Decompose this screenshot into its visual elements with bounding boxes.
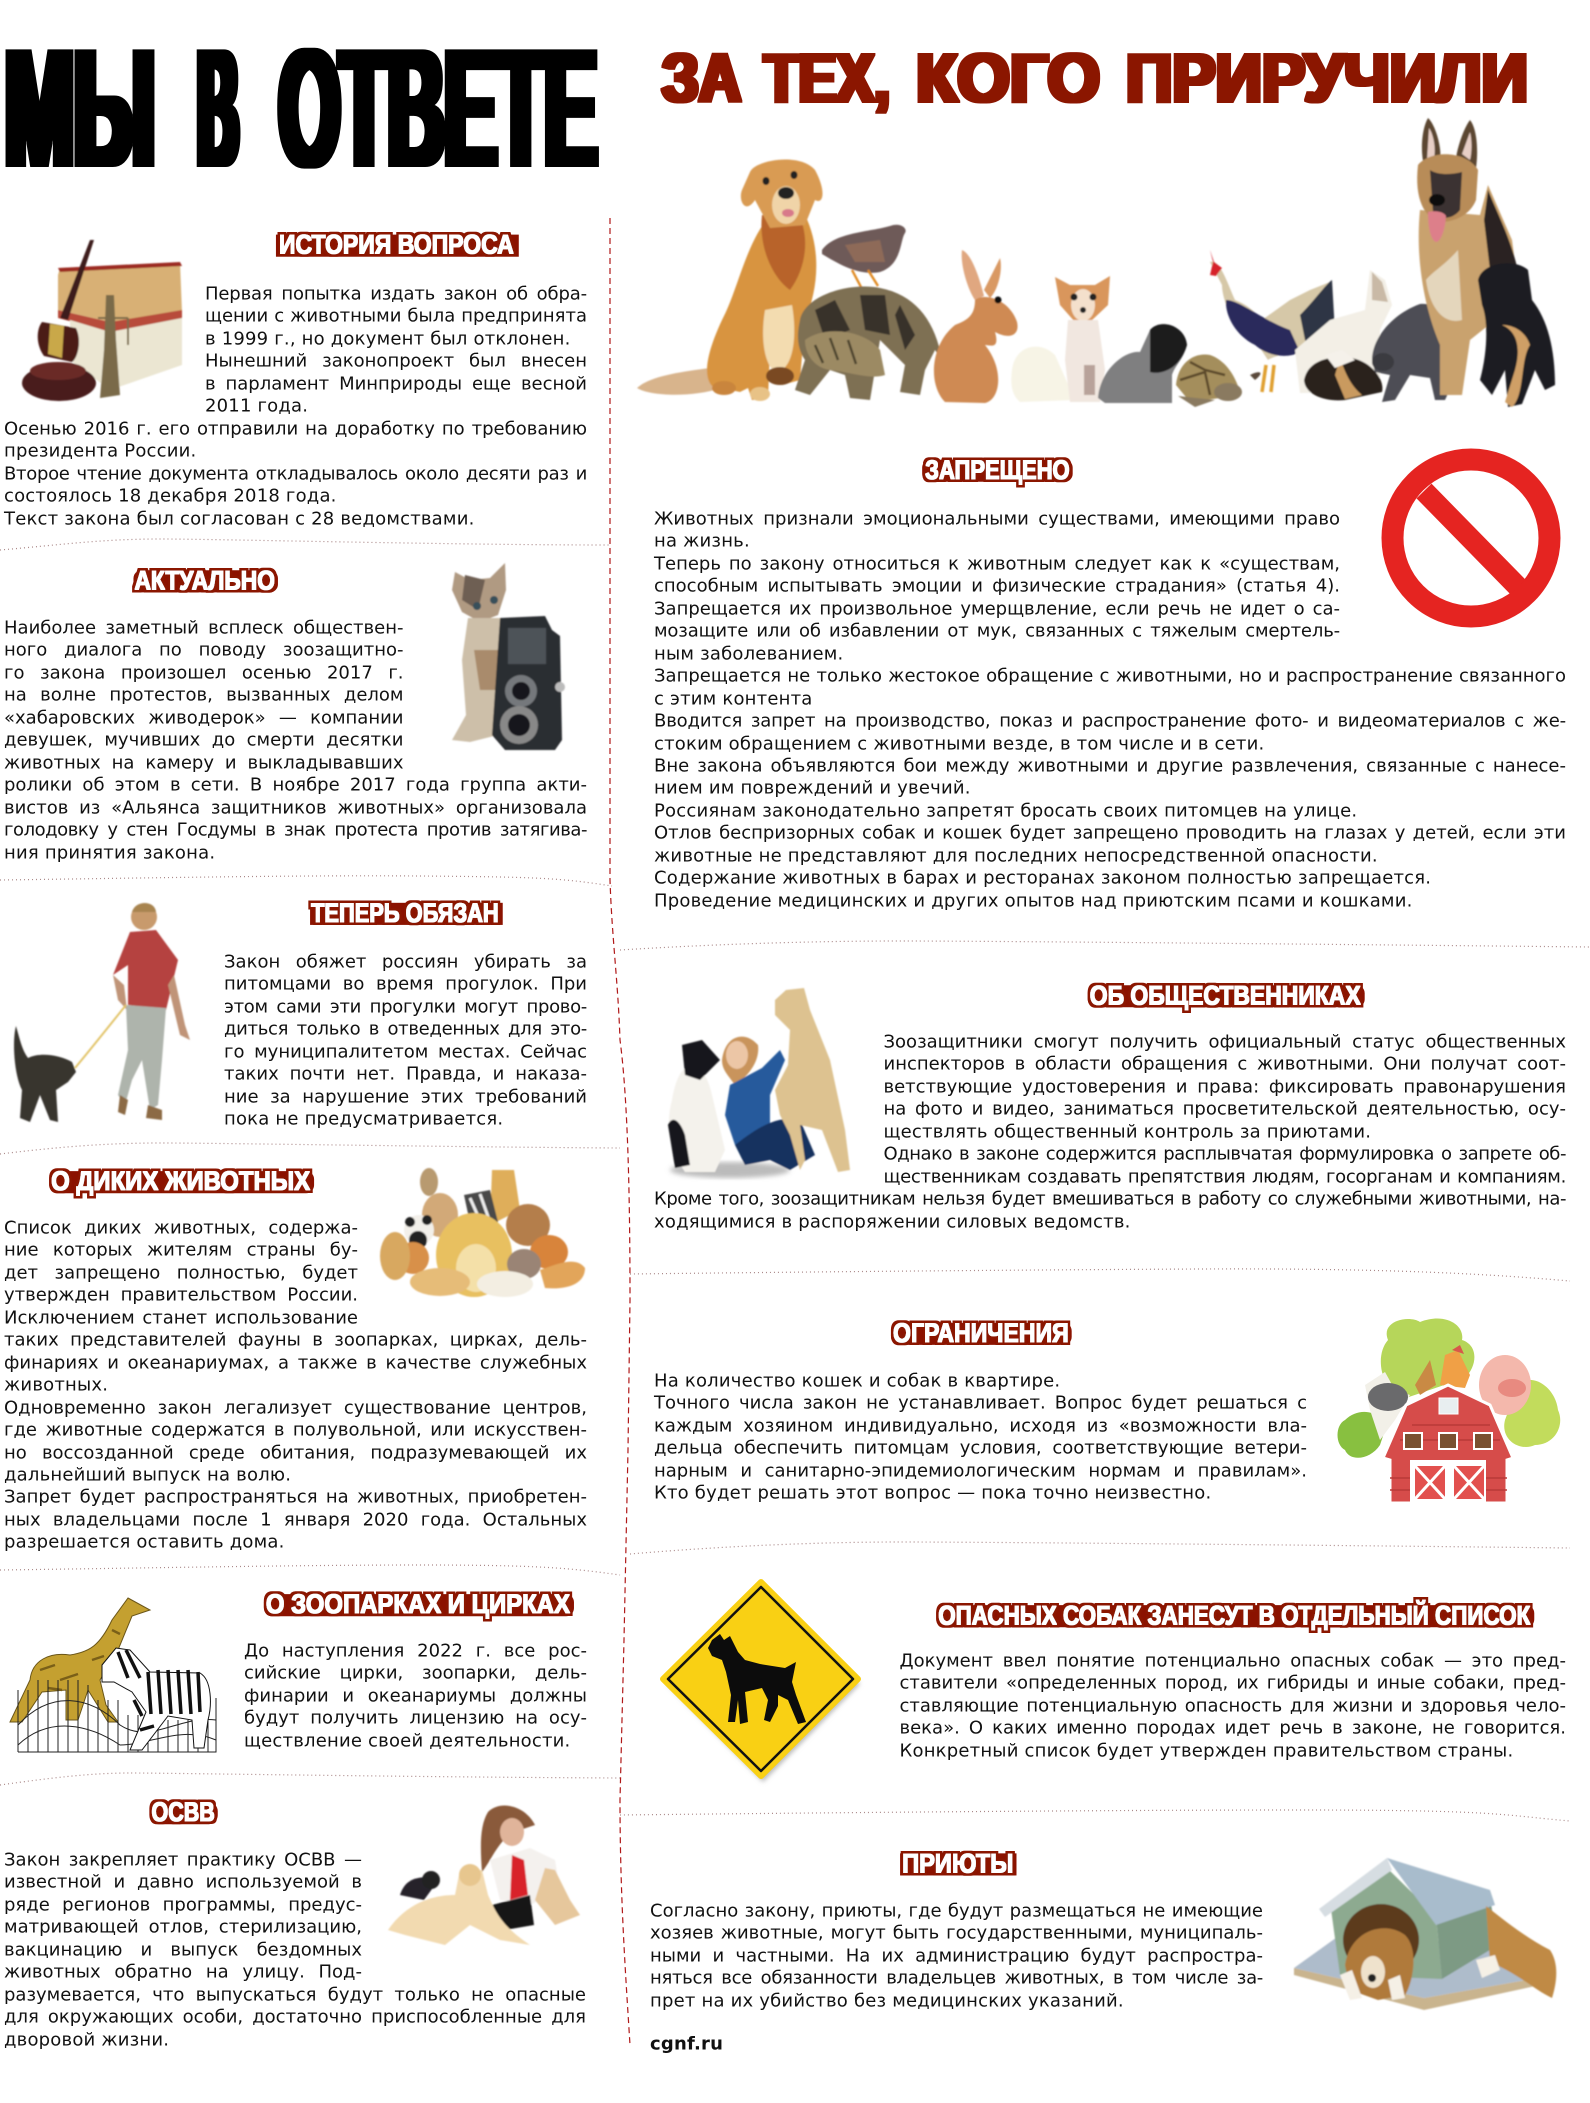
guinea pig [1304, 350, 1382, 400]
text: о зоопарках и цирках: сийские цирки, зоопарки, дель- [244, 1663, 587, 1684]
text: запрещено: Животных признали эмоциональными существами, имеющими право [654, 508, 1340, 530]
rabbit [934, 250, 1018, 403]
text: об общественниках [654, 1032, 1566, 1232]
text: актуально: девушек, мучивших до смерти десятки [4, 730, 404, 751]
text: история вопроса: в 1999 г., но документ был отклонен. [205, 328, 571, 349]
text: о диких животных: дет запрещено полностью, будет [4, 1262, 358, 1283]
black puppy [1478, 263, 1555, 407]
heading: актуально: АКТУАЛЬНО [134, 564, 275, 595]
heading: теперь обязан: ТЕПЕРЬ ОБЯЗАН [311, 897, 499, 928]
text: приюты: няться все обязанности владельцев животных, в том числе за- [650, 1968, 1263, 1989]
illustration: dog in kennel [1294, 1858, 1556, 2010]
text: ОТВЕТЕ [279, 14, 597, 202]
text: запрещено: ным заболеванием. [654, 643, 843, 664]
text: ограничения: На количество кошек и собак в квартире. [654, 1370, 1060, 1392]
text: приюты [650, 1900, 1263, 2011]
text: запрещено: мозащите или об избавлении от мук, связанных с тяжелым смертель- [654, 621, 1340, 642]
text: теперь обязан: пока не предусматривается. [224, 1109, 503, 1130]
text: актуально: вистов из «Альянса защитников животных» организовала [4, 797, 587, 818]
text: о диких животных: Одновременно закон легализует существование центров, [4, 1397, 587, 1418]
german shepherd [1417, 118, 1520, 395]
text: теперь обязан: ние за нарушение этих требований [224, 1086, 587, 1107]
text: о диких животных: утвержден правительством России. [4, 1285, 358, 1306]
text: освв [4, 1850, 586, 2050]
text: запрещено: способным испытывать эмоции и физические страдания» (статья 4). [654, 576, 1340, 597]
text: о зоопарках и цирках: ществление своей деятельности. [244, 1730, 570, 1751]
text: опасные собаки: Документ ввел понятие потенциально опасных собак — это пред- [900, 1650, 1566, 1672]
text: запрещено: с этим контента [654, 688, 812, 709]
text: опасные собаки [900, 1650, 1566, 1761]
illustration: barn with animals [1338, 1318, 1560, 1503]
white cat [1295, 270, 1392, 393]
text: запрещено: нием им повреждений и увечий. [654, 778, 971, 799]
text: запрещено: Отлов беспризорных собак и кошек будет запрещено проводить на глазах у детей, если эти [654, 823, 1566, 844]
text: о диких животных: Запрет будет распространяться на животных, приобретен- [4, 1487, 587, 1508]
headings [49, 229, 1534, 1878]
text: актуально: голодовку у стен Госдумы в знак протеста против затягива- [4, 820, 587, 841]
title: main black: МЫ [5, 14, 155, 202]
title: main black [5, 14, 597, 202]
text: запрещено: Вводится запрет на производство, показ и распространение фото- и видеоматериалов с же- [654, 711, 1566, 732]
text: ограничения: Точного числа закон не устанавливает. Вопрос будет решаться с [654, 1393, 1307, 1414]
text: история вопроса: Второе чтение документа откладывалось около десяти раз и [4, 463, 587, 484]
text: о диких животных: дальнейший выпуск на волю. [4, 1464, 291, 1485]
text: освв: Закон закрепляет практику ОСВВ — [4, 1850, 362, 1870]
title: red subtitle [662, 39, 1528, 117]
title: red subtitle: КОГО [916, 39, 1100, 117]
text: о зоопарках и цирках: финарии и океанариумы должны [244, 1685, 587, 1706]
text: актуально: го закона произошел осенью 2017 г. [4, 662, 404, 683]
black pig [1372, 304, 1458, 402]
text: актуально: ролики об этом в сети. В ноябре 2017 года группа акти- [4, 775, 587, 796]
text: о диких животных [4, 1218, 587, 1553]
text: опасные собаки: Конкретный список будет утвержден правительством страны. [900, 1740, 1513, 1761]
text: об общественниках: инспекторов в области обращения с животными. Они получат соот- [884, 1054, 1566, 1075]
text: освв: известной и давно используемой в [4, 1872, 362, 1893]
text: запрещено: Содержание животных в барах и ресторанах законом полностью запрещается. [654, 868, 1431, 889]
text: история вопроса: в парламент Минприроды еще весной [205, 373, 587, 394]
text: запрещено: на жизнь. [654, 531, 750, 552]
text: опасные собаки: ставители «определенных пород, их гибриды и иные собаки, пред- [900, 1673, 1566, 1694]
text: о диких животных: разрешается оставить дома. [4, 1532, 285, 1553]
text: о диких животных: финариях и океанариумах, а также в качестве служебных [4, 1352, 587, 1373]
photo: woman with dogs [668, 988, 850, 1178]
text: теперь обязан: питомцами во время прогулок. При [224, 974, 587, 995]
text: запрещено: Вне закона объявляются бои между животными и другие развлечения, связанные с нанесе- [654, 755, 1566, 776]
text: приюты: ными и частными. На их администрацию будут распростра- [650, 1945, 1263, 1966]
text: ограничения [654, 1370, 1307, 1504]
heading: о диких животных: О ДИКИХ ЖИВОТНЫХ [51, 1165, 310, 1196]
text: актуально: животных на камеру и выкладывавших [4, 752, 404, 773]
text: теперь обязан: диться только в отведенных для это- [224, 1019, 587, 1040]
text: запрещено: Запрещается не только жестокое обращение с животными, но и распространение связанного [654, 666, 1566, 687]
icon: prohibition sign [1392, 460, 1550, 616]
text: освв: разумевается, что выпускаться будут только не опасные [4, 1984, 586, 2005]
text: приюты: хозяев животные, могут быть государственными, муниципаль- [650, 1923, 1263, 1944]
text: о диких животных: Исключением станет использование [4, 1307, 358, 1328]
text: теперь обязан: таких почти нет. Правда, и наказа- [224, 1064, 587, 1085]
title: red subtitle: ЗА [662, 39, 741, 117]
text: освв: животных обратно на улицу. Под- [4, 1962, 362, 1983]
text: актуально [4, 618, 587, 863]
text: об общественниках: Зоозащитники смогут получить официальный статус общественных [884, 1032, 1566, 1052]
text: история вопроса: Текст закона был согласован с 28 ведомствами. [4, 508, 475, 529]
text: ограничения: дельца обеспечить питомцам условия, соответствующие ветери- [654, 1438, 1307, 1459]
text: теперь обязан: этом сами эти прогулки могут прово- [224, 996, 587, 1017]
title: main black: В [198, 14, 238, 202]
tortoise [1176, 354, 1242, 407]
photo: row of animals [637, 118, 1555, 407]
text: о диких животных: Список диких животных, содержа- [4, 1218, 358, 1238]
heading: об общественниках: ОБ ОБЩЕСТВЕННИКАХ [1090, 979, 1361, 1010]
golden retriever [637, 159, 823, 401]
text: история вопроса: Первая попытка издать закон об обра- [205, 284, 587, 304]
text: запрещено: животные не представляют для последних непосредственной опасности. [654, 845, 1378, 866]
rooster [1210, 250, 1336, 392]
heading: история вопроса: ИСТОРИЯ ВОПРОСА [279, 229, 514, 260]
text: приюты: Согласно закону, приюты, где будут размещаться не имеющие [650, 1900, 1263, 1922]
text: приюты: прет на их убийство без медицинских указаний. [650, 1990, 1124, 2011]
white chick [1011, 347, 1075, 402]
text: теперь обязан: го муниципалитетом местах. Сейчас [224, 1041, 587, 1062]
text: о диких животных: ние которых жителям страны бу- [4, 1240, 358, 1261]
photo: pile of wild animal toys [380, 1168, 585, 1297]
text: запрещено [654, 508, 1566, 911]
text: история вопроса: Нынешний законопроект был внесен [205, 351, 587, 372]
photo: gavel, law books, statue [22, 240, 182, 401]
text: опасные собаки: века». О каких именно породах идет речь в законе, не говорится. [900, 1718, 1566, 1739]
illustration: giraffe and zebra at fence [10, 1598, 216, 1752]
text: актуально: «хабаровских живодерок» — компании [4, 707, 404, 728]
text: освв: для окружающих особи, достаточно приспособленные для [4, 2007, 586, 2028]
text: актуально: ния принятия закона. [4, 842, 215, 863]
text: о диких животных: где животные содержатся в полувольной, или искусствен- [4, 1420, 587, 1441]
heading: приюты: ПРИЮТЫ [902, 1847, 1013, 1878]
text: опасные собаки: ставляющие потенциальную опасность для жизни и здоровья чело- [900, 1695, 1566, 1716]
text: ограничения: каждым хозяином индивидуально, исходя из «возможности вла- [654, 1415, 1307, 1436]
text: об общественниках: на фото и видео, заниматься просветительской деятельностью, осу- [884, 1099, 1566, 1120]
text: об общественниках: Однако в законе содержится расплывчатая формулировка о запрете об- [884, 1144, 1566, 1165]
text: история вопроса: состоялось 18 декабря 2018 года. [4, 486, 337, 507]
text: о диких животных: животных. [4, 1375, 108, 1396]
text: об общественниках: щественникам создавать препятствия людям, госорганам и компаниям. [884, 1166, 1566, 1187]
text: теперь обязан: Закон обяжет россиян убирать за [224, 952, 587, 972]
text: о зоопарках и цирках [244, 1640, 587, 1751]
text: освв: вакцинацию и выпуск бездомных [4, 1939, 362, 1960]
text: о диких животных: ных владельцами после 1 января 2020 года. Остальных [4, 1509, 587, 1530]
text: история вопроса: щении с животными была предпринята [205, 306, 587, 327]
tabby cat [795, 287, 942, 400]
quail [822, 225, 906, 287]
icon: dangerous dog road sign [663, 1582, 860, 1782]
chihuahua [1055, 276, 1110, 402]
text: запрещено: стоким обращением с животными везде, в том числе и в сети. [654, 733, 1264, 754]
heading: ограничения: ОГРАНИЧЕНИЯ [893, 1317, 1069, 1348]
text: запрещено: Запрещается их произвольное умерщвление, если речь не идет о са- [654, 598, 1340, 619]
text: об общественниках: ществлять общественный контроль за приютами. [884, 1121, 1371, 1142]
text: история вопроса [4, 284, 587, 529]
photo: vet with pets [388, 1806, 580, 1945]
text: освв: матривающей отлов, стерилизацию, [4, 1917, 362, 1938]
text: ограничения: Кто будет решать этот вопрос — пока точно неизвестно. [654, 1483, 1211, 1504]
text: освв: дворовой жизни. [4, 2029, 169, 2050]
source: cgnf.ru: cgnf.ru [650, 2034, 723, 2054]
text: история вопроса: 2011 года. [205, 396, 308, 417]
heading: освв: ОСВВ [152, 1796, 215, 1827]
photo: man walking dog [14, 903, 190, 1122]
text: история вопроса: президента России. [4, 441, 196, 462]
text: о зоопарках и цирках: будут получить лицензию на осу- [244, 1708, 587, 1729]
heading: запрещено: ЗАПРЕЩЕНО [925, 454, 1070, 485]
text: об общественниках: ходящимися в распоряжении силовых ведомств. [654, 1211, 1131, 1232]
text: о диких животных: таких представителей фауны в зоопарках, цирках, дель- [4, 1330, 587, 1351]
title: red subtitle: ТЕХ, [764, 39, 890, 117]
text: освв: ряде регионов программы, предус- [4, 1894, 362, 1915]
text: запрещено: Проведение медицинских и других опытов над приютским псами и кошками. [654, 890, 1413, 911]
text: актуально: на волне протестов, вызванных делом [4, 685, 404, 706]
text: теперь обязан [224, 952, 587, 1130]
text: о диких животных: но воссозданной среде обитания, подразумевающей их [4, 1442, 587, 1463]
text: история вопроса: Осенью 2016 г. его отправили на доработку по требованию [4, 418, 587, 439]
title: red subtitle: ПРИРУЧИЛИ [1126, 39, 1528, 117]
text: актуально: ного диалога по поводу зоозащитно- [4, 640, 404, 661]
text: об общественниках: ветствующие удостоверения и права: фиксировать правонарушения [884, 1076, 1566, 1097]
text: о зоопарках и цирках: До наступления 2022 г. все рос- [244, 1640, 587, 1662]
text: запрещено: Россиянам законодательно запретят бросать своих питомцев на улице. [654, 800, 1357, 821]
text: об общественниках: Кроме того, зоозащитникам нельзя будет вмешиваться в работу со служебными животными, на- [654, 1189, 1566, 1210]
heading: о зоопарках и цирках: О ЗООПАРКАХ И ЦИРКАХ [266, 1588, 570, 1619]
text: актуально: Наиболее заметный всплеск обществен- [4, 618, 404, 638]
text: ограничения: нарным и санитарно-эпидемиологическим нормам и правилам». [654, 1460, 1307, 1481]
photo: kitten with camera [452, 563, 565, 750]
silkie hen [1098, 324, 1187, 403]
text: запрещено: Теперь по закону относиться к животным следует как к «существам, [654, 553, 1340, 574]
